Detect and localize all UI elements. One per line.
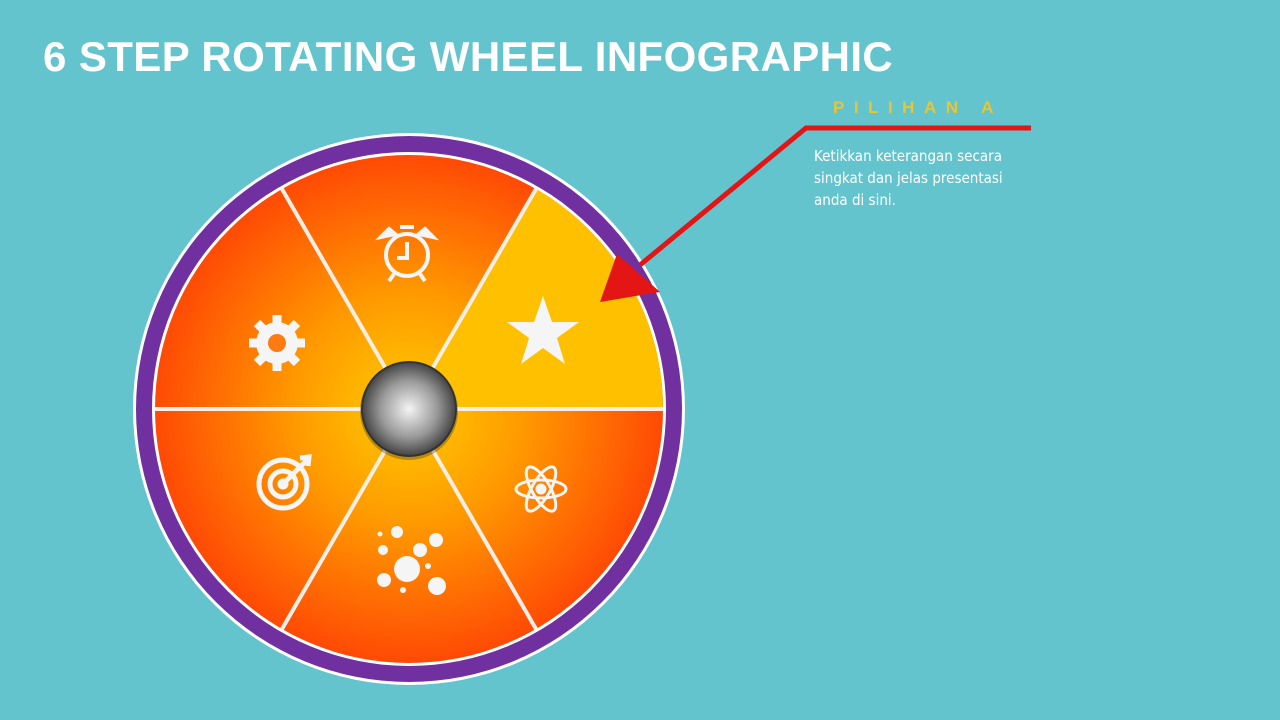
icon: gear bbox=[249, 315, 305, 371]
title: 6 STEP ROTATING WHEEL INFOGRAPHIC bbox=[43, 33, 893, 80]
label: pilihan A: PILIHAN A bbox=[833, 98, 1003, 117]
icon: star bbox=[507, 296, 579, 364]
icon: target bbox=[259, 457, 309, 508]
description text: Ketikkan keterangan secara singkat dan jelas presentasi anda di sini. bbox=[814, 147, 1003, 209]
icon: atom bbox=[516, 463, 566, 515]
hub bbox=[360, 362, 458, 460]
segment: highlighted yellow bbox=[409, 189, 663, 409]
icon: bubbles bbox=[377, 526, 446, 595]
arrow: pointer to highlighted segment bbox=[600, 128, 1031, 302]
icon: alarm clock bbox=[381, 227, 433, 281]
